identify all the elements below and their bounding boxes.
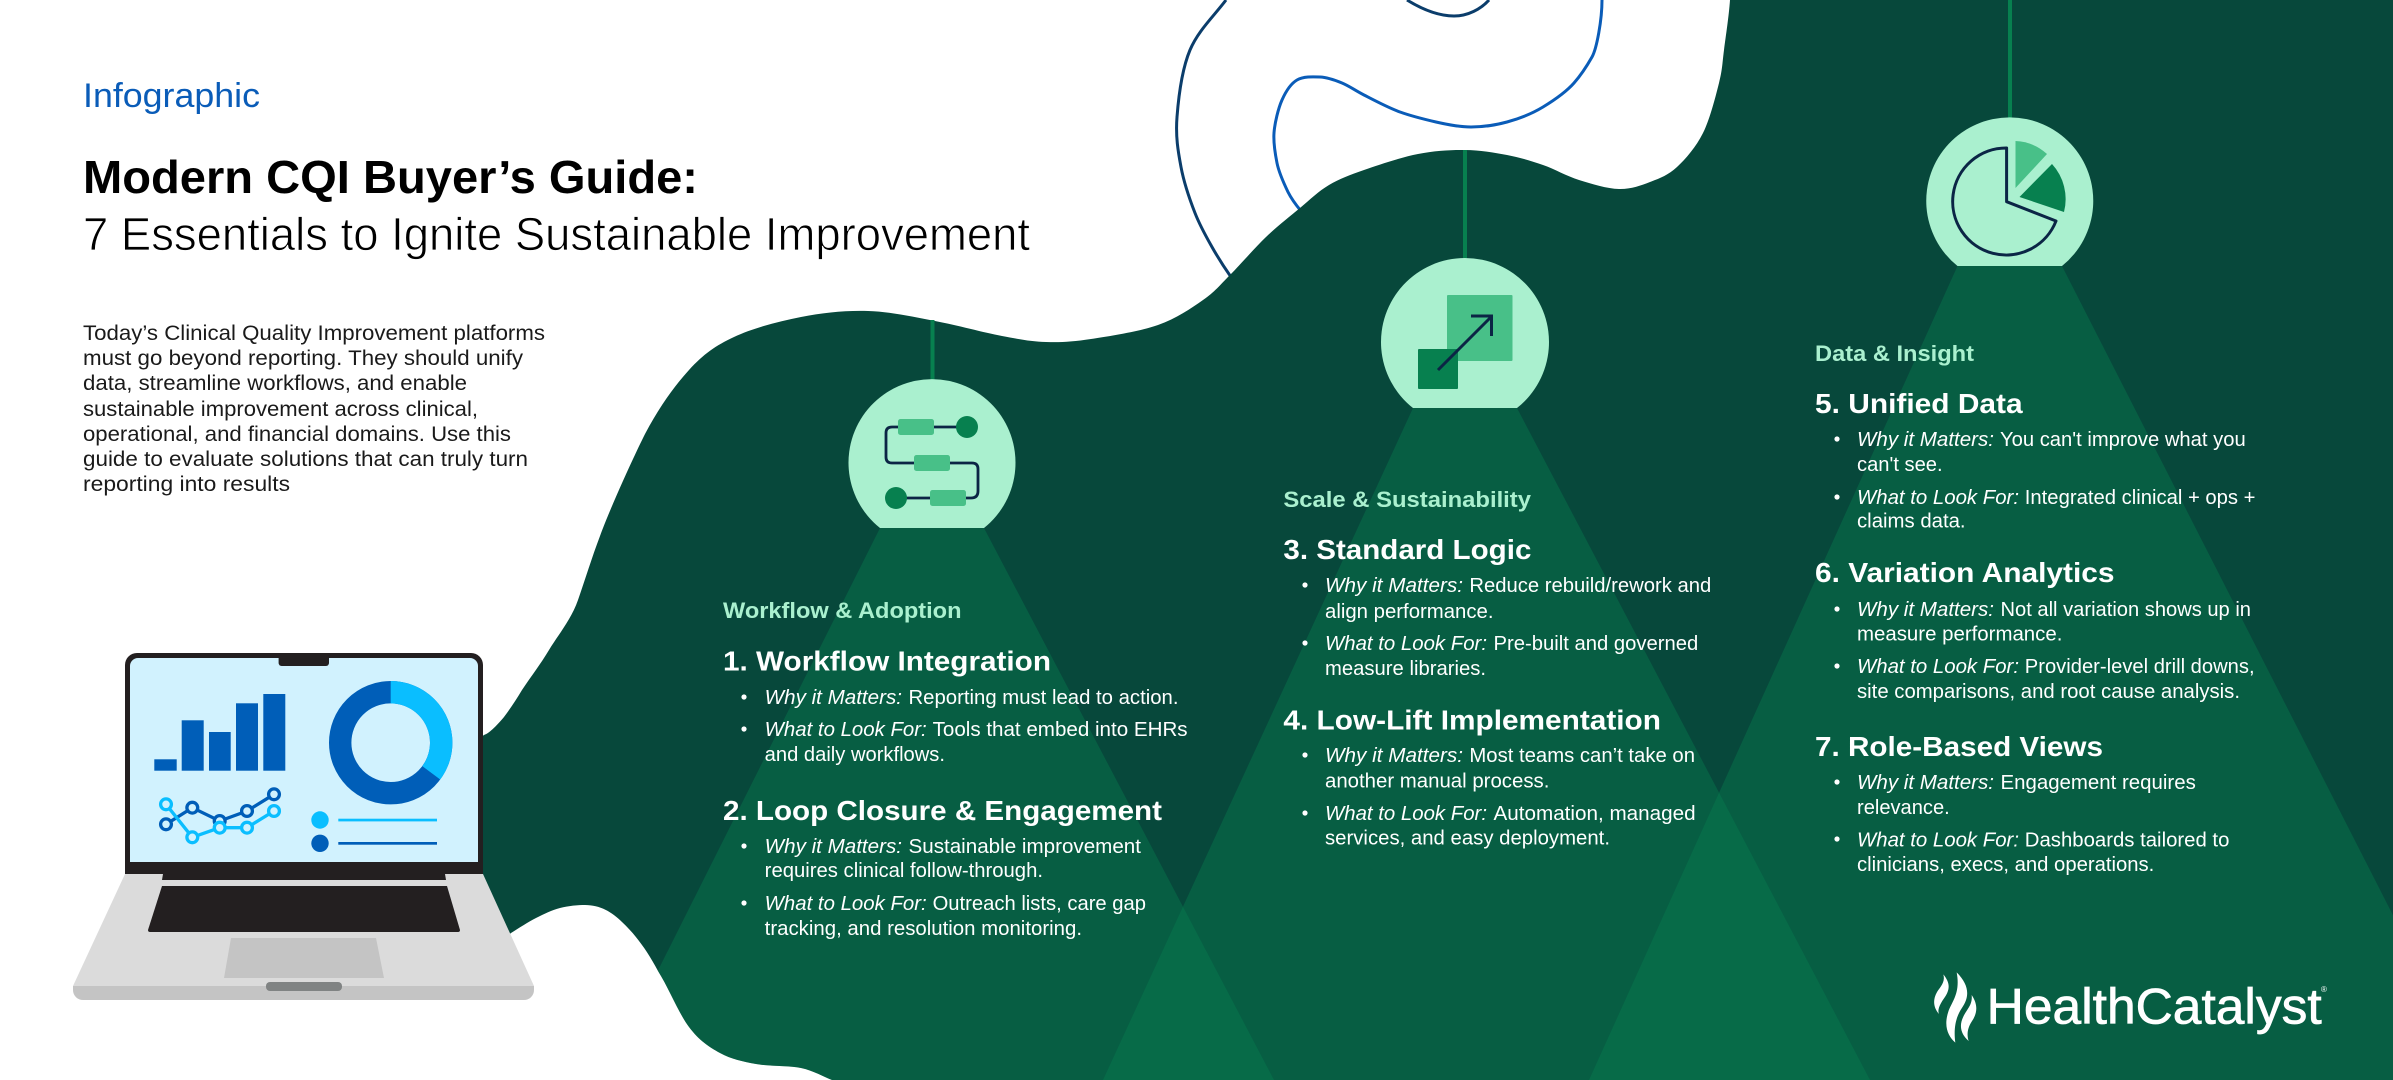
subtitle: 7 Essentials to Ignite Sustainable Improvement: [83, 208, 1030, 260]
bullets for item 3: align performance.: [1325, 601, 1494, 623]
keyboard: [148, 886, 460, 932]
icon: pie chart: [1926, 117, 2093, 266]
bullets for item 4: What to Look For:: [1325, 803, 1487, 825]
heading 5: 5. Unified Data: [1815, 388, 2023, 419]
bullets for item 1: Why it Matters:: [765, 687, 902, 709]
bullets for item 3: measure libraries.: [1325, 658, 1486, 680]
bullets for item 6: What to Look For:: [1857, 656, 2019, 678]
line chart: [161, 789, 279, 843]
panel: scale and sustainability: [1283, 487, 1711, 850]
laptop screen frame: [125, 653, 483, 874]
bullets for item 5: You can't improve what you: [2000, 429, 2246, 451]
bullets for item 4: another manual process.: [1325, 771, 1549, 793]
bullets for item 4: [1302, 745, 1696, 850]
icon: scale arrow: [1381, 258, 1549, 408]
bullets for item 5: [1834, 429, 2256, 533]
latch: [266, 982, 342, 991]
bullets for item 1: and daily workflows.: [765, 744, 945, 766]
bullets for item 6: Provider-level drill downs,: [2025, 656, 2255, 678]
bullets for item 2: [741, 836, 1146, 940]
intro paragraph: must go beyond reporting. They should unify: [83, 347, 524, 370]
heading 4: 4. Low-Lift Implementation: [1283, 704, 1661, 736]
intro paragraph: Today’s Clinical Quality Improvement platforms: [83, 322, 545, 345]
panel: data and insight: [1815, 341, 2256, 876]
bullets for item 6: measure performance.: [1857, 624, 2062, 646]
hanger line 3: [2008, 0, 2012, 118]
bullets for item 3: Pre-built and governed: [1494, 633, 1698, 655]
screen display: [130, 658, 478, 862]
heading 3: 3. Standard Logic: [1283, 534, 1531, 565]
intro paragraph: [83, 322, 545, 496]
bullets for item 7: What to Look For:: [1857, 829, 2019, 851]
bullets for item 6: site comparisons, and root cause analysis.: [1857, 681, 2240, 703]
logo: Health Catalyst: HealthCatalyst: [1987, 978, 2322, 1034]
logo: Health Catalyst: ®: [2321, 985, 2327, 994]
hanger line 1: [930, 320, 934, 382]
spotlight beam 1: [603, 528, 1274, 1080]
heading 1: 1. Workflow Integration: [723, 646, 1051, 676]
bullets for item 3: [1302, 575, 1711, 680]
trackpad: [224, 938, 384, 978]
bullets for item 5: claims data.: [1857, 511, 1966, 533]
heading 6: 6. Variation Analytics: [1815, 557, 2114, 588]
bullets for item 7: Dashboards tailored to: [2025, 829, 2229, 851]
intro paragraph: data, streamline workflows, and enable: [83, 372, 467, 395]
bullets for item 2: Sustainable improvement: [908, 836, 1141, 858]
decorative curve: navy line: [1177, 0, 1489, 277]
bullets for item 6: Not all variation shows up in: [2000, 599, 2251, 621]
bullets for item 3: Why it Matters:: [1325, 575, 1463, 597]
bullets for item 7: Engagement requires: [2000, 772, 2196, 794]
bullets for item 4: services, and easy deployment.: [1325, 828, 1610, 850]
heading 7: 7. Role-Based Views: [1815, 731, 2103, 762]
bullets for item 2: tracking, and resolution monitoring.: [765, 918, 1082, 940]
bullets for item 4: Most teams can’t take on: [1469, 745, 1695, 767]
spotlight beam 2: [1103, 408, 1870, 1080]
bullets for item 6: Why it Matters:: [1857, 599, 1994, 621]
bullets for item 4: Automation, managed: [1494, 803, 1696, 825]
panel: workflow and adoption: [723, 598, 1188, 940]
intro paragraph: reporting into results: [83, 473, 290, 496]
bullets for item 3: Reduce rebuild/rework and: [1469, 575, 1711, 597]
camera notch: [279, 658, 329, 666]
bullets for item 7: clinicians, execs, and operations.: [1857, 854, 2154, 876]
bullets for item 1: [741, 687, 1188, 766]
category heading: Workflow & Adoption: [723, 598, 962, 623]
bullets for item 3: What to Look For:: [1325, 633, 1487, 655]
icon: workflow: [848, 379, 1015, 528]
bar chart: [154, 694, 285, 771]
heading 2: 2. Loop Closure & Engagement: [723, 795, 1162, 826]
bullets for item 5: Integrated clinical + ops +: [2025, 487, 2256, 509]
logo: Health Catalyst: [1934, 972, 2327, 1043]
bullets for item 2: Outreach lists, care gap: [933, 893, 1146, 915]
intro paragraph: sustainable improvement across clinical,: [83, 398, 478, 421]
bullets for item 2: requires clinical follow-through.: [765, 860, 1043, 882]
bullets for item 1: Tools that embed into EHRs: [933, 719, 1188, 741]
title: Modern CQI Buyer’s Guide:: [83, 151, 698, 203]
bullets for item 2: What to Look For:: [765, 893, 927, 915]
bullets for item 7: [1834, 772, 2229, 876]
bullets for item 7: relevance.: [1857, 797, 1950, 819]
laptop illustration: [73, 653, 534, 1000]
intro paragraph: operational, and financial domains. Use this: [83, 423, 511, 446]
donut chart: [340, 681, 452, 793]
bullets for item 5: Why it Matters:: [1857, 429, 1994, 451]
decorative curve: blue line: [1274, 0, 1602, 211]
eyebrow: Infographic: Infographic: [83, 77, 260, 115]
bullets for item 6: [1834, 599, 2255, 703]
chart legend: [311, 811, 437, 852]
category heading: Scale & Sustainability: [1283, 487, 1532, 512]
hanger line 2: [1463, 150, 1467, 262]
category heading: Data & Insight: [1815, 341, 1975, 366]
dark green background blob: [483, 0, 2393, 1080]
bullets for item 1: Reporting must lead to action.: [908, 687, 1178, 709]
bullets for item 7: Why it Matters:: [1857, 772, 1994, 794]
bullets for item 1: What to Look For:: [765, 719, 927, 741]
bullets for item 2: Why it Matters:: [765, 836, 902, 858]
bullets for item 5: can't see.: [1857, 454, 1943, 476]
laptop base: [73, 874, 534, 986]
intro paragraph: guide to evaluate solutions that can truly turn: [83, 448, 528, 471]
spotlight beam 3: [1589, 266, 2393, 1080]
bullets for item 5: What to Look For:: [1857, 487, 2019, 509]
bullets for item 4: Why it Matters:: [1325, 745, 1463, 767]
